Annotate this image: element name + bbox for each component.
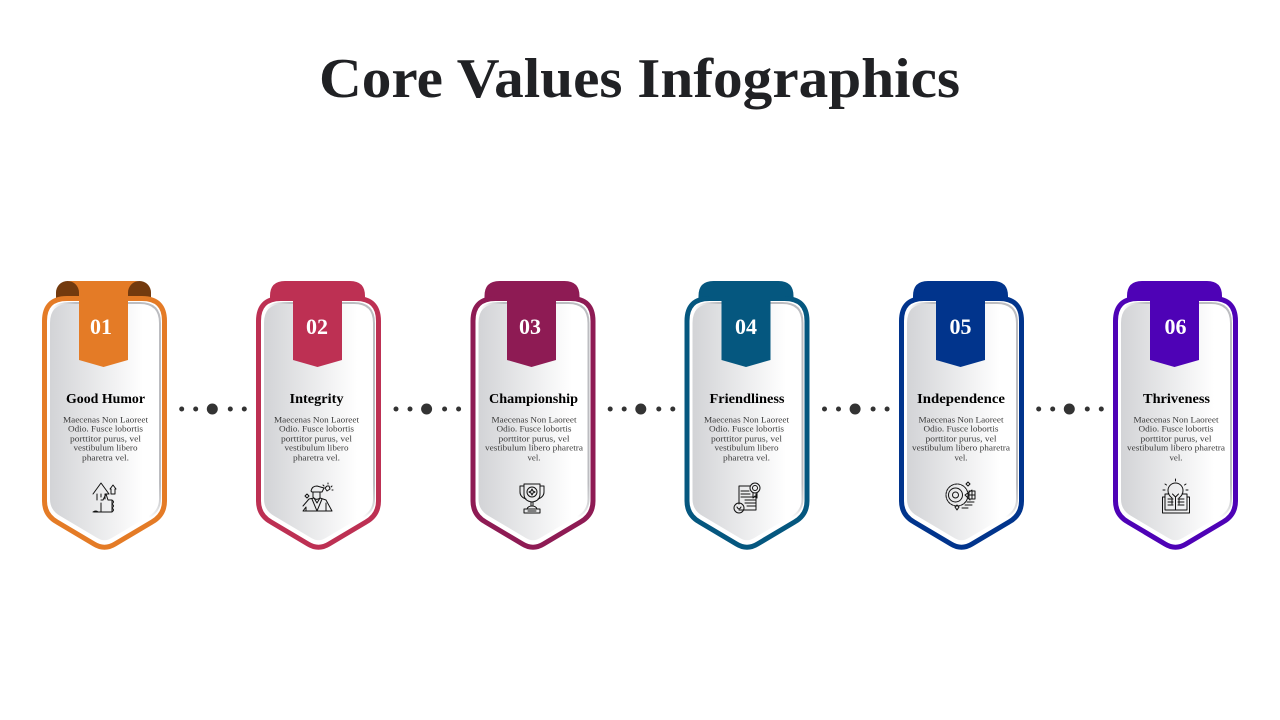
top tab <box>270 281 365 318</box>
body text: porttitor purus, vel <box>711 434 783 444</box>
card inner panel <box>906 303 1017 541</box>
icon: trophy <box>520 484 544 513</box>
heading: Friendliness <box>710 392 785 407</box>
top tab <box>913 281 1008 318</box>
body text <box>704 414 790 462</box>
body text: Maecenas Non Laoreet <box>63 414 149 424</box>
body text <box>485 414 583 462</box>
body text: Maecenas Non Laoreet <box>1134 414 1219 424</box>
top tab <box>56 281 151 318</box>
body text: vel. <box>528 452 540 462</box>
title: Core Values Infographics <box>319 48 960 110</box>
connector dots 4 <box>822 404 890 414</box>
card frame <box>258 298 378 547</box>
card 2: Integrity <box>258 281 378 547</box>
number: 02 <box>306 314 328 339</box>
body text <box>63 414 149 462</box>
body text: Maecenas Non Laoreet <box>704 414 790 424</box>
card frame <box>902 298 1022 547</box>
connector dots 3 <box>608 404 675 414</box>
icon: person with idea <box>303 483 333 511</box>
ribbon <box>293 281 342 367</box>
ribbon <box>722 281 770 367</box>
body text: porttitor purus, vel <box>498 434 570 444</box>
body text: vel. <box>1170 452 1182 462</box>
ribbon <box>1150 281 1199 367</box>
card inner panel <box>478 303 588 541</box>
card 5: Independence <box>902 281 1022 547</box>
connector dots 5 <box>1036 404 1104 414</box>
body text: Odio. Fusce lobortis <box>279 424 355 434</box>
top tab <box>1127 281 1222 318</box>
body text: Odio. Fusce lobortis <box>709 424 785 434</box>
body text: Odio. Fusce lobortis <box>924 424 999 434</box>
body text: pharetra vel. <box>723 452 770 462</box>
body text: vel. <box>954 452 968 462</box>
card 3: Championship <box>473 281 593 547</box>
card 4: Friendliness <box>687 281 807 547</box>
body text: Maecenas Non Laoreet <box>274 414 360 424</box>
body text: vestibulum libero pharetra <box>485 442 583 452</box>
ribbon <box>79 281 128 367</box>
body text: porttitor purus, vel <box>281 434 353 444</box>
heading: Thriveness <box>1143 392 1211 407</box>
body text: porttitor purus, vel <box>70 434 142 444</box>
heading: Integrity <box>290 392 344 407</box>
body text: Odio. Fusce lobortis <box>1138 424 1214 434</box>
number: 03 <box>519 314 541 339</box>
card inner panel <box>1120 303 1231 541</box>
body text: pharetra vel. <box>293 452 340 462</box>
heading: Championship <box>489 392 578 407</box>
body text: pharetra vel. <box>82 452 129 462</box>
icon: open book with light bulb <box>1162 479 1190 513</box>
body text: Maecenas Non Laoreet <box>918 414 1004 424</box>
card inner panel <box>49 303 160 541</box>
connector dots 1 <box>179 404 247 414</box>
ribbon <box>936 281 985 367</box>
card 6: Thriveness <box>1116 281 1236 547</box>
body text: vestibulum libero <box>74 442 138 452</box>
top tab <box>698 281 794 318</box>
body text: porttitor purus, vel <box>1140 434 1212 444</box>
card frame <box>44 298 164 547</box>
card inner panel <box>692 303 802 541</box>
body text: vestibulum libero <box>284 442 348 452</box>
heading: Good Humor <box>66 392 145 407</box>
card frame <box>473 298 593 547</box>
ribbon <box>507 281 556 367</box>
tab ears <box>56 281 151 298</box>
icon: gear with speed lines <box>946 482 975 510</box>
body text <box>1127 414 1225 462</box>
body text: Odio. Fusce lobortis <box>68 424 144 434</box>
number: 05 <box>950 314 972 339</box>
card 1: Good Humor <box>44 281 164 547</box>
number: 06 <box>1164 314 1186 339</box>
body text <box>912 414 1010 462</box>
card frame <box>687 298 807 547</box>
connector dots 2 <box>394 404 461 414</box>
body text: Odio. Fusce lobortis <box>496 424 572 434</box>
body text: porttitor purus, vel <box>926 434 997 444</box>
body text: vestibulum libero <box>714 442 778 452</box>
body text: vestibulum libero pharetra <box>912 442 1010 452</box>
icon: certificate with badge <box>734 483 760 513</box>
top tab <box>484 281 580 318</box>
icon: thumbs up with arrows <box>93 483 116 512</box>
card frame <box>1116 298 1236 547</box>
body text <box>274 414 360 462</box>
number: 01 <box>90 314 112 339</box>
body text: Maecenas Non Laoreet <box>492 414 577 424</box>
number: 04 <box>735 314 757 339</box>
body text: vestibulum libero pharetra <box>1127 442 1225 452</box>
heading: Independence <box>917 392 1005 407</box>
card inner panel <box>263 303 374 541</box>
